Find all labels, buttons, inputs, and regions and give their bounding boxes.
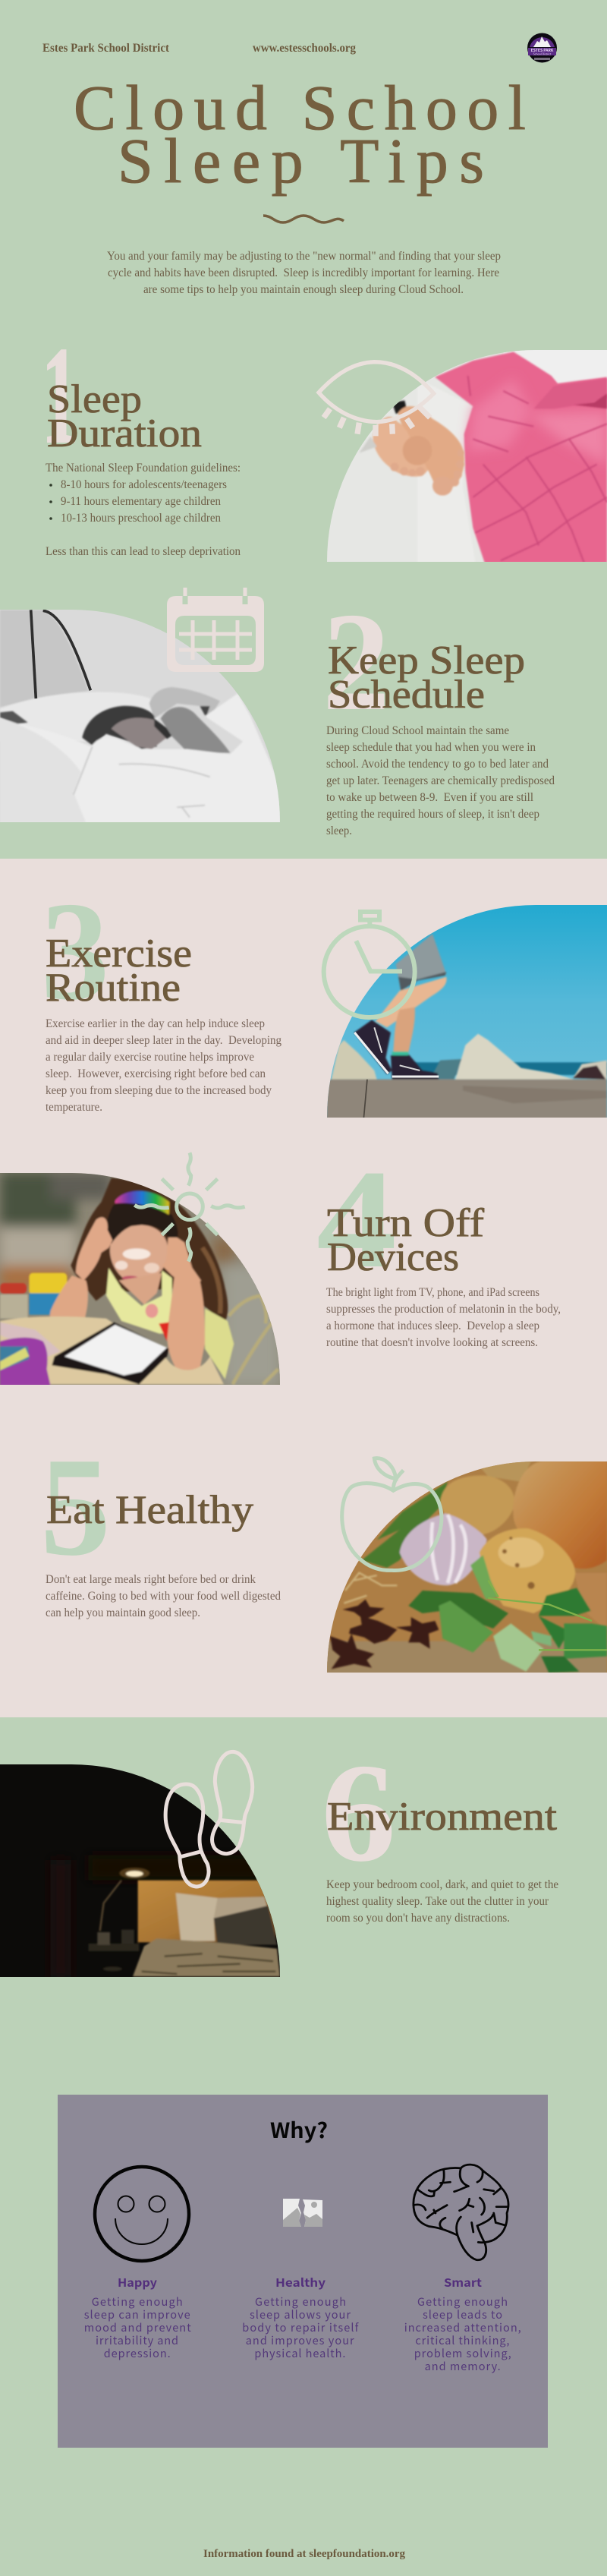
text block: sleep schedule that you had when you were in (326, 741, 536, 754)
photo: person asleep black and white (0, 607, 281, 825)
heading (47, 377, 202, 456)
column: happy: irritability and (96, 2332, 178, 2348)
photo: dark bedroom with lamp (0, 1764, 281, 1979)
heading (46, 932, 192, 1010)
title (74, 73, 526, 197)
heading: Keep Sleep (328, 638, 525, 683)
column: smart: critical thinking, (415, 2332, 509, 2348)
column: smart (404, 2275, 521, 2374)
icon: broken image (283, 2199, 322, 2227)
footer source: Information found at sleepfoundation.org (203, 2548, 405, 2560)
heading: Environment (327, 1795, 557, 1839)
text block: room so you don't have any distractions. (326, 1912, 510, 1925)
title: Sleep Tips (118, 126, 484, 197)
heading: Sleep (47, 377, 142, 421)
text block: The bright light from TV, phone, and iPad screens (326, 1286, 539, 1299)
text block: a hormone that induces sleep. Develop a sleep (326, 1320, 539, 1332)
number 6: 6 (321, 1735, 396, 1891)
panel background (58, 2095, 548, 2448)
text block: to wake up between 8-9. Even if you are still (326, 791, 534, 804)
header (42, 33, 557, 62)
photo: girl looking at tablet (0, 1171, 281, 1387)
column: healthy: Healthy (275, 2275, 326, 2291)
number 1: 1 (41, 317, 79, 474)
photo: feet under pink blanket (311, 345, 607, 566)
icon: sun (134, 1152, 245, 1262)
column: happy: sleep can improve (84, 2306, 190, 2322)
panel: tip 3 exercise routine (46, 905, 607, 1118)
text block: Don't eat large meals right before bed or drink (46, 1573, 256, 1586)
text block (46, 1573, 281, 1619)
text block: Less than this can lead to sleep deprivation (46, 545, 241, 558)
column: happy: depression. (104, 2345, 171, 2361)
column: smart: problem solving, (414, 2345, 511, 2361)
icon: footprints (165, 1751, 253, 1887)
icon: eye (319, 362, 434, 436)
column: smart: increased attention, (404, 2319, 521, 2335)
panel: tip 1 sleep duration (46, 349, 607, 562)
panel: tip 5 eat healthy (46, 1456, 607, 1673)
column: healthy: sleep allows your (250, 2306, 351, 2322)
column: smart: sleep leads to (423, 2306, 502, 2322)
intro text: are some tips to help you maintain enough sleep during Cloud School. (143, 283, 464, 296)
icon: calendar (167, 588, 264, 672)
text block (46, 1017, 281, 1114)
text block: and aid in deeper sleep later in the day. Developing (46, 1034, 281, 1047)
number 3: 3 (41, 873, 109, 1029)
column: healthy (242, 2275, 360, 2361)
text block: getting the required hours of sleep, it isn't deep (326, 808, 539, 821)
text block: During Cloud School maintain the same (326, 724, 509, 737)
number 4: 4 (316, 1141, 397, 1297)
intro text (107, 250, 501, 296)
column: smart: Smart (444, 2275, 483, 2291)
background: green bottom band (0, 1717, 607, 2576)
text block (326, 724, 555, 837)
text block: sleep. (326, 825, 352, 837)
text block: sleep. However, exercising right before bed can (46, 1067, 266, 1080)
text block: a regular daily exercise routine helps improve (46, 1051, 254, 1064)
column: smart: and memory. (425, 2358, 501, 2374)
heading (327, 1201, 484, 1279)
heading: Devices (327, 1235, 459, 1279)
column: happy: Getting enough (92, 2294, 183, 2310)
heading (328, 638, 525, 717)
panel: tip 2 keep sleep schedule (0, 584, 555, 837)
column: healthy: physical health. (254, 2345, 345, 2361)
text block: get up later. Teenagers are chemically predisposed (326, 774, 555, 787)
panel: tip 6 environment (0, 1735, 558, 1979)
intro text: You and your family may be adjusting to the "new normal" and finding that your sleep (107, 250, 501, 263)
panel: tip 4 turn off devices (0, 1141, 561, 1387)
website: www.estesschools.org (253, 42, 356, 55)
text block (326, 1878, 558, 1925)
text block: Exercise earlier in the day can help induce sleep (46, 1017, 265, 1030)
heading: Routine (46, 966, 181, 1010)
heading: Turn Off (327, 1201, 484, 1245)
panel: why (58, 2095, 548, 2448)
icon: district logo (527, 33, 557, 62)
text block: The National Sleep Foundation guidelines: (46, 462, 241, 475)
text block: 8-10 hours for adolescents/teenagers (61, 478, 227, 491)
column: smart: Getting enough (417, 2294, 508, 2310)
background: green top band (0, 0, 607, 859)
heading: Eat Healthy (46, 1488, 254, 1532)
icon: district logo: ESTES PARK (531, 48, 554, 53)
photo: vegetables and spices (327, 1461, 607, 1673)
icon: smiley (95, 2167, 189, 2261)
squiggle divider (263, 216, 344, 222)
icon: district logo: School District (533, 53, 552, 56)
heading: Duration (47, 411, 202, 456)
column: happy: mood and prevent (84, 2319, 191, 2335)
column: healthy: body to repair itself (242, 2319, 360, 2335)
text block: caffeine. Going to bed with your food well digested (46, 1590, 281, 1603)
heading: Schedule (328, 673, 485, 717)
heading: Exercise (46, 932, 192, 976)
heading: why: Why? (270, 2114, 328, 2145)
number 2: 2 (322, 584, 390, 740)
district name: Estes Park School District (42, 42, 170, 55)
title: Cloud School (74, 73, 526, 143)
icon: brain (414, 2165, 508, 2260)
text block: 10-13 hours preschool age children (61, 512, 221, 525)
column: happy (84, 2275, 191, 2361)
column: healthy: and improves your (246, 2332, 354, 2348)
text block (326, 1286, 561, 1349)
intro text: cycle and habits have been disrupted. Sleep is incredibly important for learning. Here (108, 266, 499, 279)
photo: legs and sneakers on rocks (311, 903, 607, 1124)
number 5: 5 (40, 1429, 111, 1585)
text block: can help you maintain good sleep. (46, 1606, 200, 1619)
text block: routine that doesn't involve looking at screens. (326, 1336, 538, 1349)
text block (46, 462, 241, 558)
text block: 9-11 hours elementary age children (61, 495, 221, 508)
text block: keep you from sleeping due to the increased body (46, 1084, 272, 1097)
background: pink middle band (0, 859, 607, 1717)
icon: apple (342, 1458, 442, 1570)
column: healthy: Getting enough (255, 2294, 346, 2310)
text block: school. Avoid the tendency to go to bed later and (326, 758, 549, 771)
text block: suppresses the production of melatonin in the body, (326, 1303, 561, 1316)
column: happy: Happy (118, 2275, 157, 2291)
icon: stopwatch (324, 912, 415, 1017)
text block: highest quality sleep. Take out the clutter in your (326, 1895, 549, 1908)
text block: temperature. (46, 1101, 102, 1114)
text block: Keep your bedroom cool, dark, and quiet to get the (326, 1878, 558, 1891)
